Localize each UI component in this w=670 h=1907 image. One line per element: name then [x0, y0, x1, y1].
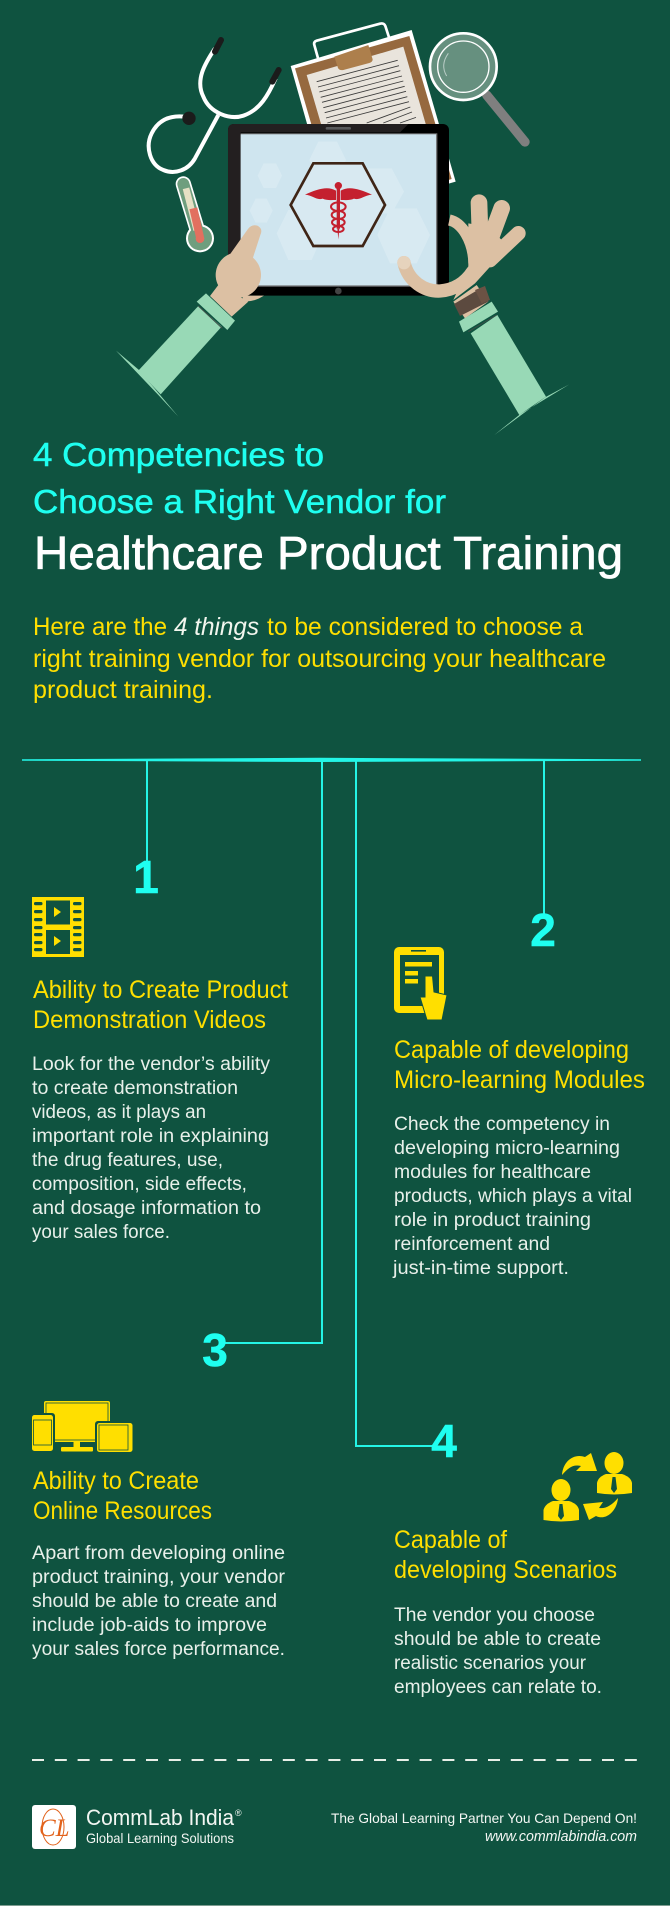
intro text block: right training vendor for outsourcing your healthcare — [33, 645, 606, 673]
title: 4 Competencies to — [33, 436, 324, 473]
number 2: 2 — [530, 904, 556, 956]
panel: competency 1 — [32, 851, 288, 1243]
logo wordmark: CommLab India — [86, 1805, 235, 1830]
body text: reinforcement and — [394, 1234, 550, 1255]
icon: two people with exchange arrows — [544, 1452, 632, 1522]
number 4: 4 — [431, 1415, 457, 1467]
body text: include job-aids to improve — [32, 1615, 267, 1636]
icon: right arm and hand — [397, 203, 569, 435]
body text: Check the competency in — [394, 1114, 610, 1135]
body text: and dosage information to — [32, 1198, 261, 1219]
icon: magnifying glass — [430, 33, 525, 142]
body text: to create demonstration — [32, 1078, 238, 1099]
body text — [392, 1114, 632, 1279]
body text: developing micro-learning — [394, 1138, 620, 1159]
body text: composition, side effects, — [32, 1174, 247, 1195]
body text: modules for healthcare — [394, 1162, 591, 1183]
heading — [394, 1036, 645, 1094]
logo wordmark: Global Learning Solutions — [86, 1830, 234, 1846]
body text: should be able to create and — [32, 1591, 277, 1612]
icon: phone with pointing hand — [394, 947, 447, 1020]
number 1: 1 — [133, 851, 159, 903]
body text: important role in explaining — [32, 1126, 269, 1147]
connector lines from divider to numbers — [22, 758, 641, 1446]
heading: Capable of — [394, 1526, 507, 1554]
body text: just-in-time support. — [392, 1258, 569, 1279]
icon: hexagon medical emblem — [291, 163, 385, 246]
heading: Ability to Create Product — [33, 976, 288, 1004]
body text: your sales force. — [32, 1222, 170, 1243]
title: Choose a Right Vendor for — [33, 483, 446, 520]
hero illustration: tablet with medical items — [116, 23, 569, 435]
intro text block: 4 things — [174, 613, 259, 641]
icon: left arm and hand — [116, 225, 264, 417]
body text: Look for the vendor’s ability — [32, 1054, 271, 1075]
body text: the drug features, use, — [32, 1150, 223, 1171]
logo mark — [32, 1805, 76, 1849]
icon: clipboard — [291, 23, 456, 217]
footer logo: CommLab India — [32, 1805, 242, 1849]
icon: film strip — [32, 897, 84, 957]
panel: competency 4 — [394, 1415, 632, 1698]
icon: monitor, phone and tablet — [30, 1401, 134, 1454]
icon: thermometer — [183, 184, 214, 252]
intro text block: product training. — [33, 676, 213, 704]
heading — [33, 976, 288, 1034]
number 3: 3 — [202, 1324, 228, 1376]
body text: products, which plays a vital — [394, 1186, 632, 1207]
body text — [394, 1605, 602, 1698]
logo wordmark: ® — [235, 1808, 242, 1818]
intro text block — [33, 613, 606, 704]
heading: Demonstration Videos — [33, 1006, 266, 1034]
logo mark: CL — [39, 1815, 70, 1842]
body text: should be able to create — [394, 1629, 601, 1650]
icon: tablet — [228, 124, 449, 296]
heading: developing Scenarios — [394, 1556, 617, 1584]
footer tagline and website: The Global Learning Partner You Can Depend On! — [331, 1810, 637, 1826]
intro text block: to be considered to choose a — [267, 613, 583, 641]
body text: videos, as it plays an — [32, 1102, 206, 1123]
body text: product training, your vendor — [32, 1567, 286, 1588]
body text — [32, 1054, 271, 1243]
panel: competency 2 — [392, 904, 645, 1279]
heading — [33, 1467, 212, 1525]
body text: Apart from developing online — [32, 1543, 285, 1564]
heading: Micro-learning Modules — [394, 1066, 645, 1094]
body text: employees can relate to. — [394, 1677, 602, 1698]
logo wordmark — [86, 1805, 242, 1846]
intro text block: Here are the — [33, 613, 167, 641]
body text: role in product training — [394, 1210, 591, 1231]
body text — [32, 1543, 286, 1660]
footer tagline and website — [331, 1810, 637, 1845]
icon: stethoscope — [149, 40, 279, 172]
body text: The vendor you choose — [394, 1605, 595, 1626]
heading: Capable of developing — [394, 1036, 629, 1064]
body text: your sales force performance. — [32, 1639, 285, 1660]
heading: Ability to Create — [33, 1467, 199, 1495]
heading — [394, 1526, 617, 1584]
body text: realistic scenarios your — [394, 1653, 587, 1674]
title — [33, 436, 623, 579]
panel: competency 3 — [30, 1324, 286, 1660]
heading: Online Resources — [33, 1497, 212, 1525]
screen hexagon pattern — [250, 142, 430, 263]
footer tagline and website: www.commlabindia.com — [485, 1829, 637, 1845]
title: Healthcare Product Training — [34, 527, 623, 579]
